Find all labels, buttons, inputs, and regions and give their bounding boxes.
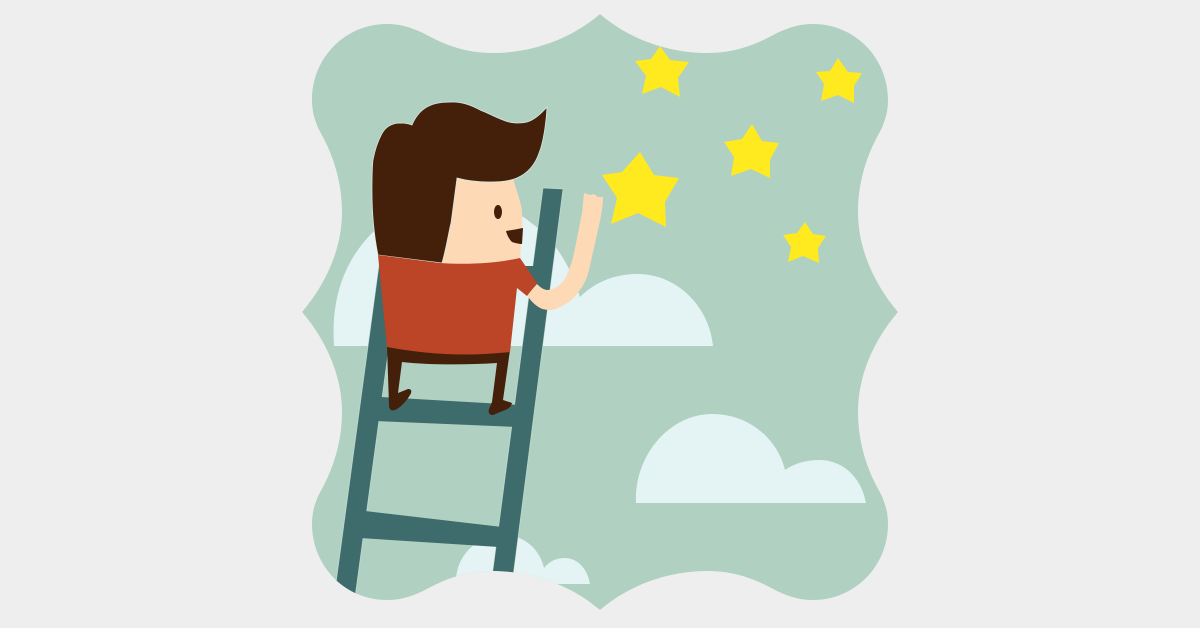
star: large near hand — [602, 152, 679, 227]
ladder right rail — [492, 188, 564, 572]
ladder rung top — [526, 266, 534, 276]
ladder rung middle — [376, 397, 520, 427]
mouth — [506, 228, 523, 244]
ear — [438, 207, 454, 223]
scene clipped to frame — [333, 46, 866, 605]
ladder rung bottom — [360, 511, 502, 547]
ladder — [333, 188, 563, 605]
illustration canvas — [302, 14, 898, 610]
star: top right — [816, 58, 862, 103]
star: top centre — [635, 46, 689, 97]
cloud: lower right — [636, 414, 866, 503]
trousers and feet — [387, 346, 512, 415]
star: lower right — [783, 222, 826, 263]
cloud: bottom small — [456, 535, 590, 584]
arm and hand — [527, 193, 603, 310]
man climbing — [372, 102, 603, 415]
star: middle — [724, 124, 779, 178]
cloud: behind the man — [334, 203, 713, 346]
shirt — [378, 255, 537, 354]
hair — [372, 102, 547, 263]
face — [442, 177, 522, 265]
eye — [494, 205, 502, 219]
panel: scalloped mint frame — [302, 14, 898, 610]
ladder left rail — [336, 265, 388, 594]
